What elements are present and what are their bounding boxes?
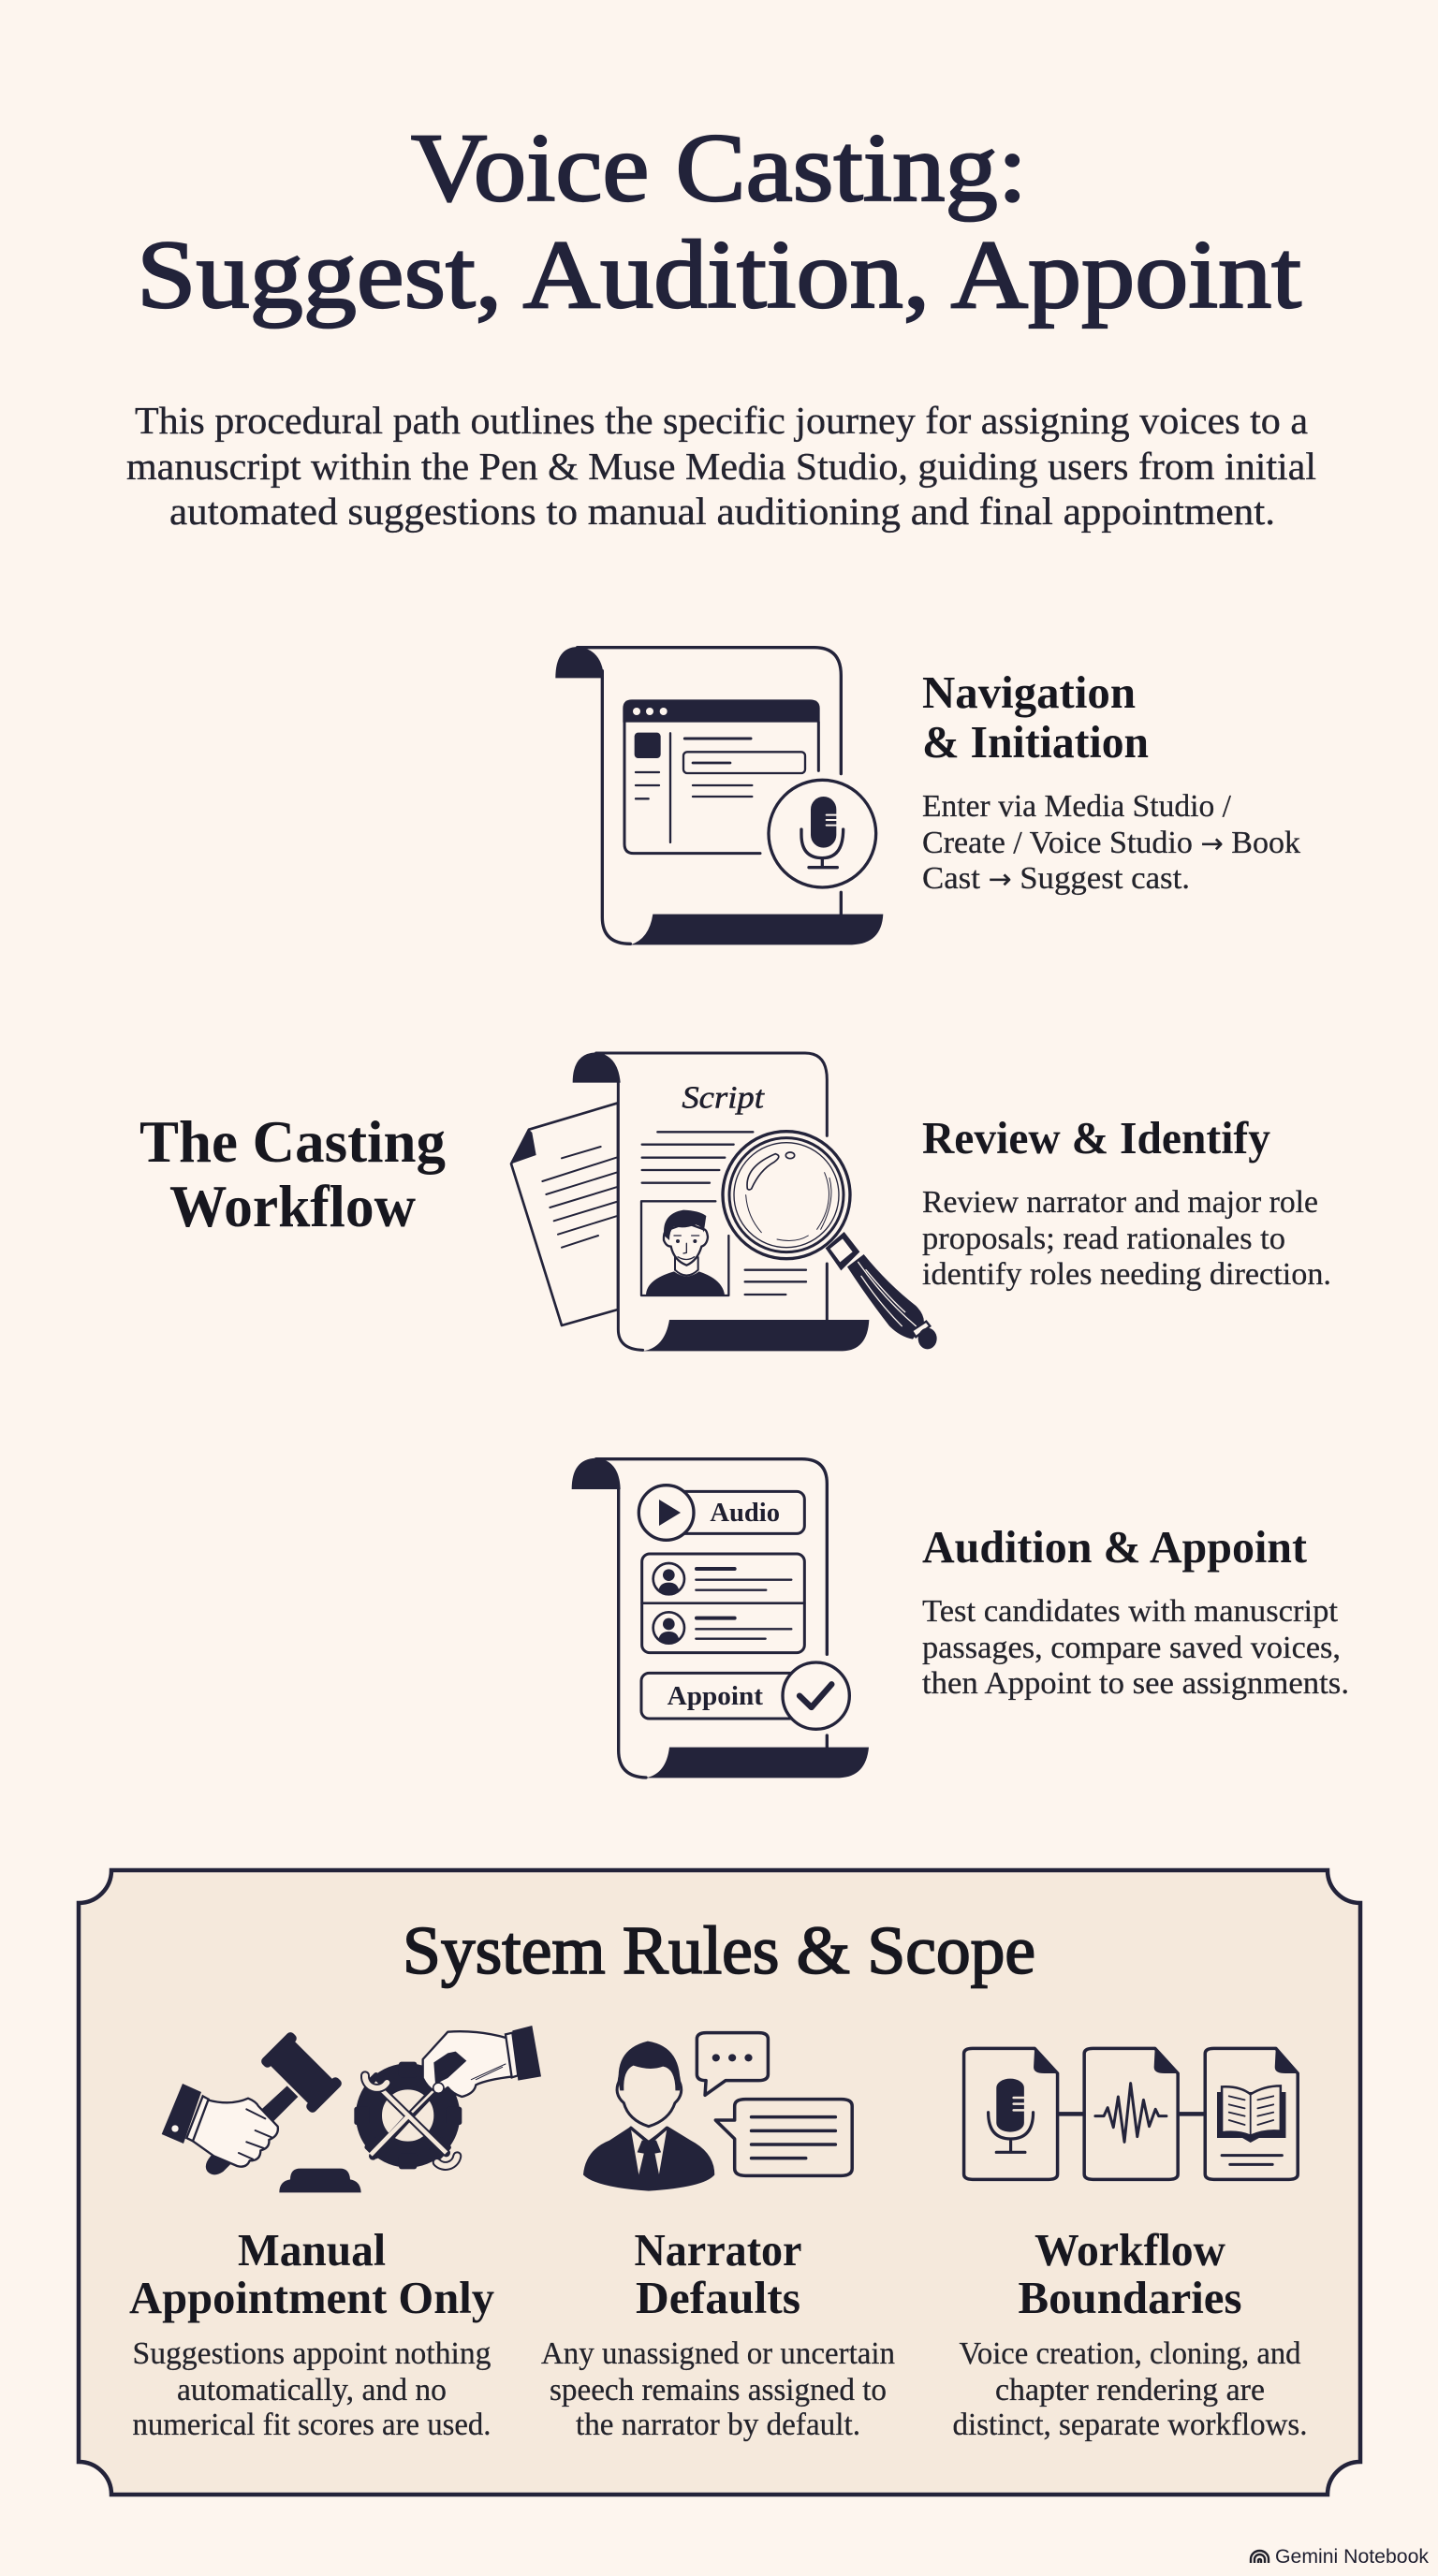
text: navigation and initiation: Enter via Media Studio / [922,789,1232,824]
text: audition and appoint: Test candidates with manuscript [922,1594,1339,1629]
text: manual appointment only: Suggestions appoint nothing [133,2336,491,2371]
intro text: This procedural path outlines the specific journey for assigning voices to a [135,399,1308,442]
text: review and identify: proposals; read rationales to [922,1222,1285,1256]
panel heading: System Rules & Scope [403,1912,1035,1988]
text: workflow boundaries: chapter rendering are [995,2373,1265,2408]
title: Suggest, Audition, Appoint [137,221,1301,329]
text: manual appointment only [129,2224,494,2442]
icon: scroll with audio player, candidates and appoint button: Audio [710,1499,780,1528]
text: navigation and initiation: Cast → Suggest cast. [922,861,1190,896]
title [137,114,1301,329]
panel: system rules and scope [79,1870,1360,2495]
text: review and identify: identify roles needing direction. [922,1257,1331,1292]
text: workflow boundaries: Workflow [1034,2224,1226,2276]
text: narrator defaults: speech remains assigned to [550,2373,887,2408]
icon: scroll with audio player, candidates and appoint button: Appoint [668,1682,764,1711]
icon: script with portrait and magnifying glass: Script [682,1080,765,1115]
text: narrator defaults: Defaults [636,2272,800,2323]
intro text: automated suggestions to manual auditioning and final appointment. [169,490,1275,533]
text: audition and appoint [922,1521,1349,1701]
text: workflow boundaries: Voice creation, cloning, and [959,2336,1301,2371]
title: Voice Casting: [411,114,1027,222]
icon: gavel and tools held by hands [162,2026,541,2192]
icon: scroll with browser window and microphone [555,647,883,944]
icon: script with portrait and magnifying glass [511,1052,937,1351]
text: workflow boundaries: Boundaries [1019,2272,1241,2323]
text: audition and appoint: Audition & Appoint [922,1521,1308,1573]
intro text [126,399,1316,533]
text: manual appointment only: numerical fit scores are used. [133,2408,491,2442]
text: navigation and initiation: Create / Voice Studio → Book [922,826,1300,860]
text: navigation and initiation [922,666,1300,896]
text: workflow boundaries [953,2224,1307,2442]
intro text: manuscript within the Pen & Muse Media Studio, guiding users from initial [126,445,1316,488]
icon: narrator with speech bubbles [583,2033,852,2191]
text: narrator defaults: the narrator by default. [576,2408,860,2442]
text: review and identify [922,1112,1331,1292]
text: review and identify: Review narrator and major role [922,1185,1318,1220]
text: manual appointment only: automatically, and no [177,2373,447,2408]
heading: the casting workflow [139,1109,446,1239]
text: narrator defaults: Any unassigned or uncertain [541,2336,895,2371]
text: review and identify: Review & Identify [922,1112,1270,1164]
text: manual appointment only: Appointment Only [129,2272,494,2323]
text: workflow boundaries: distinct, separate workflows. [953,2408,1307,2442]
heading: the casting workflow: The Casting [139,1109,446,1175]
text: navigation and initiation: Navigation [922,666,1136,718]
text: audition and appoint: then Appoint to see assignments. [922,1666,1349,1701]
footer: gemini notebook mark: Gemini Notebook [1275,2546,1430,2568]
icon: scroll with audio player, candidates and appoint button [572,1458,869,1778]
text: audition and appoint: passages, compare saved voices, [922,1631,1341,1665]
text: narrator defaults: Narrator [635,2224,801,2276]
text: narrator defaults [541,2224,895,2442]
heading: the casting workflow: Workflow [169,1174,416,1239]
text: manual appointment only: Manual [238,2224,386,2276]
text: navigation and initiation: & Initiation [922,716,1149,768]
icon: voice, waveform and book documents [964,2048,1298,2179]
